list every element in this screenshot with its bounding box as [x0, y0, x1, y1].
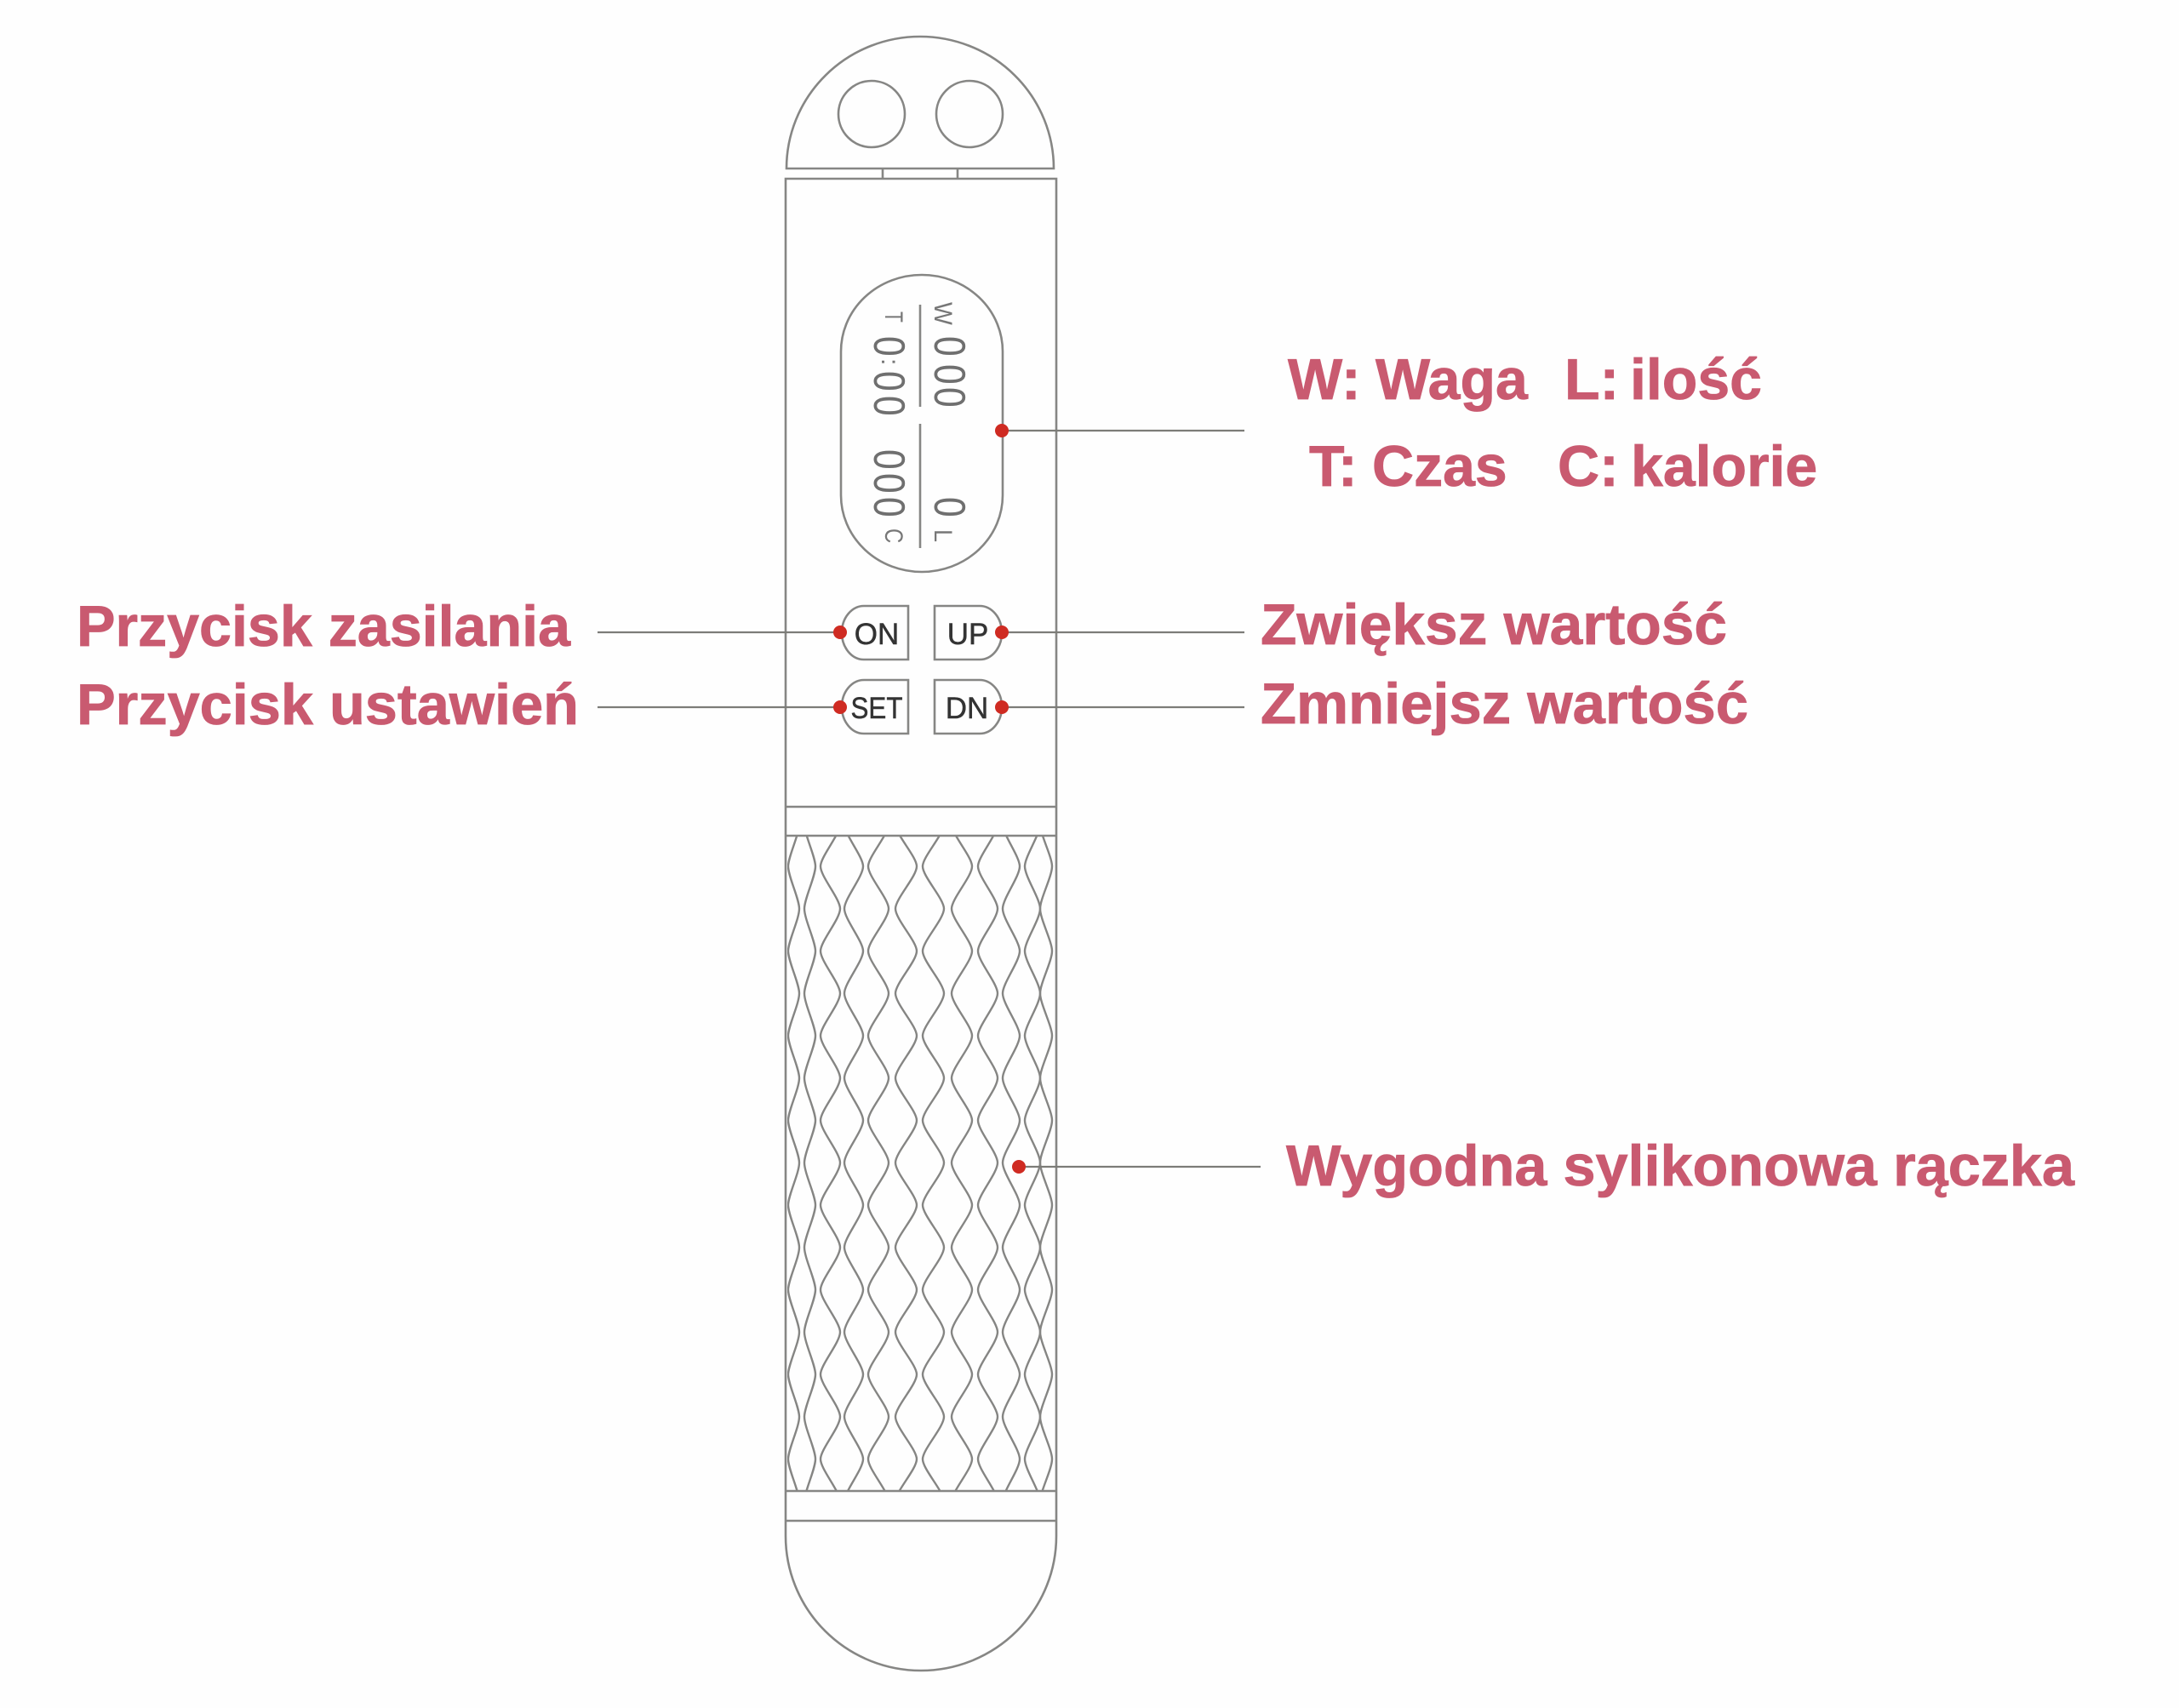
button: UP [935, 606, 1002, 660]
silicone grip lattice [787, 837, 1054, 1490]
callout: increase value [995, 592, 1727, 657]
LCD display: 0 [924, 387, 974, 408]
callout: display legend: kalorie [1631, 434, 1817, 499]
callout: display legend: ilość [1630, 347, 1762, 412]
callout: display legend: Waga [1375, 347, 1529, 412]
handle top cap with two circles [786, 37, 1054, 179]
handle body outline [786, 179, 1056, 1671]
LCD display: T [879, 311, 906, 323]
button: ON: ON [855, 618, 899, 651]
callout: display legend: Czas [1372, 434, 1507, 499]
LCD display: 0 [864, 371, 913, 391]
device: handle illustration [786, 37, 1056, 1671]
callout: power button [77, 594, 847, 659]
callout: display legend: T: [1309, 434, 1358, 499]
callout: settings button [77, 672, 847, 737]
LCD display: 0 [924, 497, 974, 517]
LCD display: 0 [924, 364, 974, 385]
callout: silicone handle: Wygodna sylikonowa rączka [1286, 1134, 2075, 1198]
button: UP: UP [947, 618, 988, 651]
LCD display: 0 [864, 396, 913, 416]
band lines below grip [786, 1491, 1056, 1521]
LCD display [841, 275, 1003, 572]
callout: display legend: L: [1564, 347, 1619, 412]
button: SET [842, 680, 908, 734]
button: DN [935, 680, 1002, 734]
LCD display: 0 [864, 473, 913, 494]
LCD display: C [879, 528, 909, 543]
callout: settings button: Przycisk ustawień [77, 672, 579, 737]
LCD display: W [929, 302, 957, 325]
LCD display: 0 [864, 449, 913, 470]
LCD display: L [929, 529, 957, 542]
callout: decrease value: Zmniejsz wartość [1261, 671, 1748, 736]
callout: display legend [995, 347, 1817, 499]
button: SET: SET [851, 692, 902, 725]
button: ON [842, 606, 908, 660]
LCD display: 0 [864, 497, 913, 517]
LCD display: 0 [864, 336, 913, 357]
band lines above grip [786, 807, 1056, 836]
button: DN: DN [946, 692, 988, 725]
callout: decrease value [995, 671, 1748, 736]
callout: increase value: Zwiększ wartość [1261, 592, 1727, 657]
LCD display: 0 [924, 336, 974, 357]
callout: display legend: W: [1288, 347, 1361, 412]
callout: display legend: C: [1558, 434, 1619, 499]
callout: power button: Przycisk zasilania [77, 594, 571, 659]
LCD display: : [876, 358, 904, 365]
